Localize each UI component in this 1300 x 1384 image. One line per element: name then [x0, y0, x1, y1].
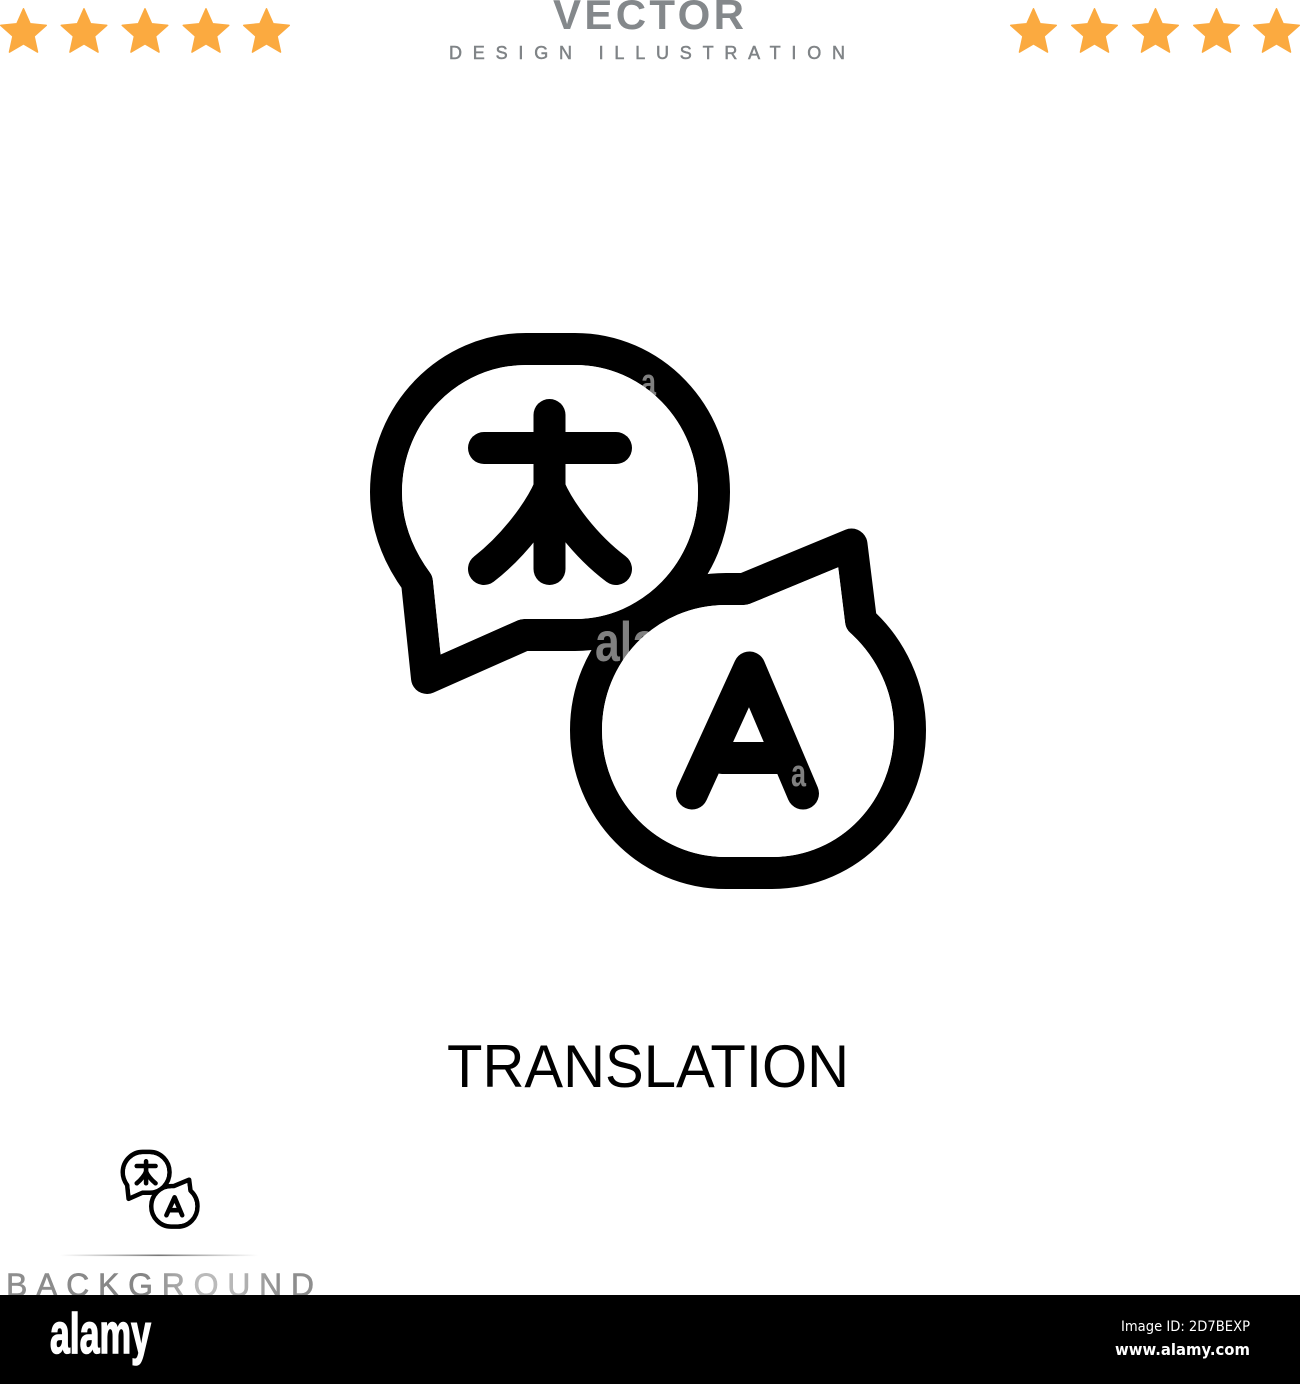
subheading: DESIGN ILLUSTRATION: DESIGN ILLUSTRATION [449, 43, 845, 63]
divider line above BACKGROUND [60, 1254, 258, 1256]
label: BACKGROUND: BACKGROUND [6, 1267, 314, 1303]
image ID: Image ID: 2D7BEXP [1121, 1319, 1250, 1335]
title: TRANSLATION: TRANSLATION [447, 1033, 849, 1100]
stars: top left rating [1, 9, 289, 52]
watermark fragments over the icon: ala [595, 610, 658, 673]
watermark fragments over the icon: a [791, 753, 807, 795]
website: www.alamy.com [1115, 1340, 1250, 1359]
bubble outlines [386, 349, 910, 873]
icon: large translation speech bubbles [386, 349, 910, 873]
bubble white interiors [402, 365, 894, 857]
stars: top right rating [1011, 9, 1299, 52]
icon: letter A strokes [692, 668, 803, 794]
watermark fragments over the icon: a [641, 362, 657, 404]
icon: small translation speech bubbles [123, 1152, 197, 1227]
watermark fragments over the icon [595, 362, 807, 795]
icon: CJK character strokes [484, 415, 616, 569]
footer bar [0, 1295, 1300, 1384]
footer background [0, 1295, 1300, 1384]
logo: alamy: alamy [50, 1302, 151, 1366]
